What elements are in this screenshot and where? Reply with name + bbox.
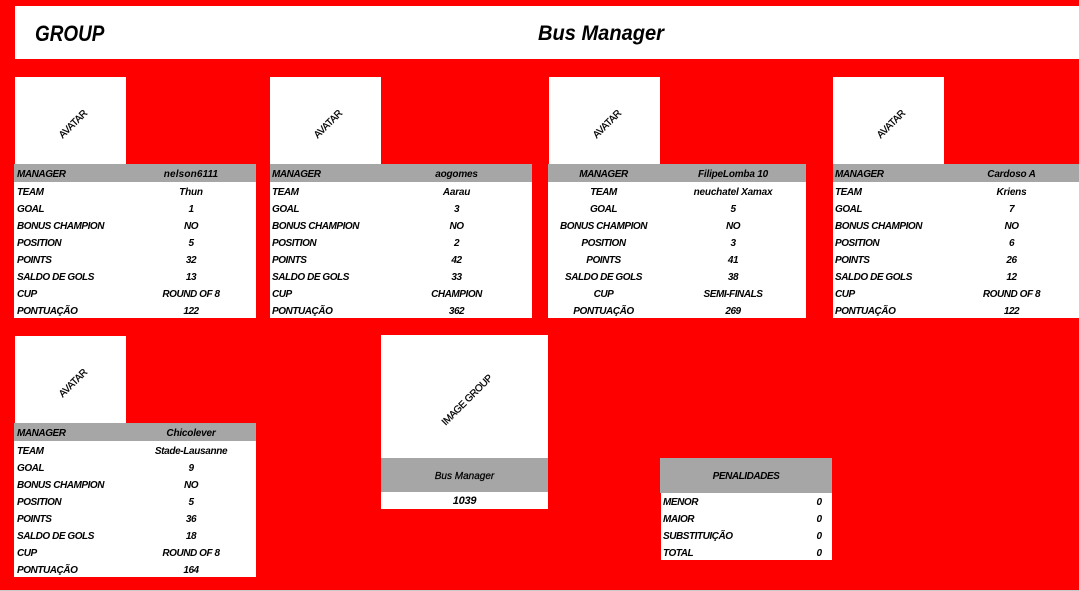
panel: manager Cardoso A: POINTS bbox=[835, 254, 870, 266]
panel: manager nelson6111 bbox=[14, 164, 256, 318]
panel: manager FilipeLomba 10: SALDO DE GOLS bbox=[565, 272, 642, 282]
panel: manager FilipeLomba 10: POINTS bbox=[586, 254, 621, 266]
panel: manager Cardoso A: Kriens bbox=[997, 186, 1026, 198]
group name bbox=[381, 458, 548, 492]
panel: manager aogomes: SALDO DE GOLS bbox=[272, 272, 349, 282]
penalties rows bbox=[661, 493, 832, 560]
penalties rows: 0 bbox=[816, 531, 822, 542]
panel: manager FilipeLomba 10: GOAL bbox=[590, 204, 617, 214]
penalties rows: TOTAL bbox=[663, 548, 693, 559]
panel: manager Chicolever: POINTS bbox=[17, 514, 52, 524]
icon: avatar placeholder 2: AVATAR bbox=[312, 108, 345, 140]
panel: manager FilipeLomba 10: 269 bbox=[725, 306, 741, 316]
panel: manager Cardoso A bbox=[833, 164, 1079, 318]
panel: manager aogomes: POSITION bbox=[272, 238, 316, 248]
panel: manager aogomes: MANAGER bbox=[272, 169, 321, 180]
panel: manager Chicolever bbox=[14, 423, 256, 577]
panel: manager Chicolever: BONUS CHAMPION bbox=[17, 480, 104, 490]
panel: manager nelson6111: CUP bbox=[17, 288, 37, 300]
panel: manager Cardoso A: TEAM bbox=[835, 186, 862, 198]
panel: manager nelson6111: GOAL bbox=[17, 204, 44, 214]
panel: manager aogomes: PONTUAÇÃO bbox=[272, 306, 332, 316]
icon: avatar placeholder 2 bbox=[270, 77, 381, 164]
panel: manager Cardoso A: MANAGER bbox=[835, 169, 884, 180]
panel: manager nelson6111: 5 bbox=[188, 238, 194, 248]
icon: avatar placeholder 3 bbox=[549, 77, 660, 164]
panel: manager nelson6111: SALDO DE GOLS bbox=[17, 272, 94, 282]
icon: group image placeholder: IMAGE GROUP bbox=[440, 373, 495, 427]
group total score: 1039 bbox=[453, 495, 476, 507]
panel: manager FilipeLomba 10: 3 bbox=[730, 238, 736, 248]
panel: manager nelson6111: 1 bbox=[188, 204, 194, 214]
panel: manager nelson6111: BONUS CHAMPION bbox=[17, 220, 104, 232]
panel: manager Cardoso A: Cardoso A bbox=[987, 169, 1036, 180]
panel: manager Chicolever: GOAL bbox=[17, 462, 44, 474]
panel: manager Cardoso A: NO bbox=[1004, 220, 1019, 232]
icon: avatar placeholder 1: AVATAR bbox=[57, 108, 90, 140]
penalties heading bbox=[660, 458, 832, 493]
penalties rows: MAIOR bbox=[663, 514, 694, 525]
panel: manager Chicolever: Stade-Lausanne bbox=[155, 446, 227, 456]
panel: manager FilipeLomba 10: SEMI-FINALS bbox=[704, 288, 762, 300]
panel: manager aogomes: NO bbox=[449, 220, 464, 232]
panel: manager Chicolever: 164 bbox=[183, 564, 199, 576]
panel: penalties bbox=[660, 458, 832, 560]
panel: manager Cardoso A: PONTUAÇÃO bbox=[835, 306, 895, 316]
panel: manager nelson6111: TEAM bbox=[17, 186, 44, 198]
panel: manager Chicolever: MANAGER bbox=[17, 428, 66, 439]
panel: manager aogomes: GOAL bbox=[272, 204, 299, 214]
panel: manager aogomes: POINTS bbox=[272, 254, 307, 266]
panel: manager Cardoso A: BONUS CHAMPION bbox=[835, 220, 922, 232]
panel: manager nelson6111: NO bbox=[184, 220, 198, 232]
panel: manager FilipeLomba 10: PONTUAÇÃO bbox=[573, 306, 634, 316]
title banner bbox=[15, 6, 1079, 59]
panel: manager aogomes: TEAM bbox=[272, 186, 299, 198]
panel: manager aogomes: 42 bbox=[451, 254, 462, 266]
icon: avatar placeholder 1 bbox=[15, 77, 126, 164]
panel: manager Chicolever: 5 bbox=[188, 496, 194, 508]
panel: manager nelson6111: Thun bbox=[179, 186, 203, 198]
panel: manager FilipeLomba 10: MANAGER bbox=[579, 169, 628, 180]
panel: manager nelson6111: PONTUAÇÃO bbox=[17, 306, 77, 316]
panel: manager Chicolever: CUP bbox=[17, 548, 37, 558]
heading: group: GROUP bbox=[35, 21, 104, 46]
panel: manager FilipeLomba 10: TEAM bbox=[590, 186, 617, 198]
panel: manager Chicolever: 9 bbox=[188, 462, 194, 474]
heading: bus manager: Bus Manager bbox=[538, 22, 664, 45]
panel: manager Cardoso A: GOAL bbox=[835, 204, 862, 214]
icon: avatar placeholder 5: AVATAR bbox=[57, 367, 90, 399]
panel: manager Chicolever: PONTUAÇÃO bbox=[17, 564, 77, 576]
panel: manager nelson6111: nelson6111 bbox=[164, 169, 218, 180]
panel: manager aogomes: 362 bbox=[449, 306, 464, 316]
panel: manager aogomes: 3 bbox=[454, 204, 459, 214]
panel: manager FilipeLomba 10: 5 bbox=[730, 204, 736, 214]
panel: manager aogomes bbox=[270, 164, 532, 318]
panel: manager Cardoso A: POSITION bbox=[835, 238, 879, 248]
penalties rows: MENOR bbox=[663, 497, 698, 508]
group name: Bus Manager bbox=[435, 471, 494, 482]
penalties rows: 0 bbox=[816, 497, 822, 508]
panel: manager FilipeLomba 10: NO bbox=[726, 220, 740, 232]
panel: manager Chicolever: ROUND OF 8 bbox=[162, 548, 220, 558]
panel: manager Cardoso A: 122 bbox=[1004, 306, 1019, 316]
panel: manager Cardoso A: CUP bbox=[835, 288, 855, 300]
panel: manager FilipeLomba 10: BONUS CHAMPION bbox=[560, 220, 647, 232]
penalties rows: 0 bbox=[816, 514, 822, 525]
panel: manager Cardoso A: 6 bbox=[1009, 238, 1014, 248]
panel: manager FilipeLomba 10: neuchatel Xamax bbox=[694, 186, 772, 198]
panel: manager FilipeLomba 10: 38 bbox=[728, 272, 738, 282]
panel: manager nelson6111: POINTS bbox=[17, 254, 52, 266]
panel: manager nelson6111: 13 bbox=[186, 272, 196, 282]
icon: avatar placeholder 3: AVATAR bbox=[591, 108, 624, 140]
icon: avatar placeholder 4: AVATAR bbox=[875, 108, 908, 140]
penalties rows: SUBSTITUIÇÃO bbox=[663, 531, 733, 542]
panel: manager aogomes: CHAMPION bbox=[431, 288, 482, 300]
panel: manager Chicolever: 36 bbox=[186, 514, 196, 524]
panel: manager aogomes: BONUS CHAMPION bbox=[272, 220, 359, 232]
panel: manager nelson6111: POSITION bbox=[17, 238, 61, 248]
panel: manager aogomes: 2 bbox=[454, 238, 459, 248]
panel: manager FilipeLomba 10 bbox=[548, 164, 806, 318]
panel: manager FilipeLomba 10: POSITION bbox=[581, 238, 626, 248]
icon: avatar placeholder 5 bbox=[15, 336, 126, 423]
panel: manager Cardoso A: 12 bbox=[1006, 272, 1017, 282]
panel: manager Chicolever: SALDO DE GOLS bbox=[17, 530, 94, 542]
icon: avatar placeholder 4 bbox=[833, 77, 944, 164]
panel: manager nelson6111: MANAGER bbox=[17, 169, 66, 180]
penalties heading: PENALIDADES bbox=[713, 471, 779, 482]
panel: group summary bbox=[381, 335, 548, 509]
panel: manager Cardoso A: ROUND OF 8 bbox=[983, 288, 1040, 300]
panel: manager Chicolever: Chicolever bbox=[166, 428, 216, 439]
panel: manager aogomes: CUP bbox=[272, 288, 292, 300]
panel: manager aogomes: aogomes bbox=[435, 169, 478, 180]
panel: manager Cardoso A: 7 bbox=[1009, 204, 1014, 214]
panel: manager Cardoso A: SALDO DE GOLS bbox=[835, 272, 912, 282]
panel: manager Cardoso A: 26 bbox=[1006, 254, 1017, 266]
panel: manager Chicolever: 18 bbox=[186, 530, 196, 542]
panel: manager nelson6111: 122 bbox=[183, 306, 199, 316]
panel: manager Chicolever: TEAM bbox=[17, 446, 44, 456]
panel: manager Chicolever: POSITION bbox=[17, 496, 61, 508]
panel: manager aogomes: 33 bbox=[451, 272, 462, 282]
panel: manager Chicolever: NO bbox=[184, 480, 198, 490]
penalties rows: 0 bbox=[816, 548, 822, 559]
panel: manager aogomes: Aarau bbox=[443, 186, 470, 198]
panel: manager nelson6111: ROUND OF 8 bbox=[162, 288, 220, 300]
panel: manager nelson6111: 32 bbox=[186, 254, 196, 266]
panel: manager FilipeLomba 10: CUP bbox=[594, 288, 613, 300]
panel: manager FilipeLomba 10: FilipeLomba 10 bbox=[698, 169, 768, 180]
panel: manager FilipeLomba 10: 41 bbox=[728, 254, 738, 266]
